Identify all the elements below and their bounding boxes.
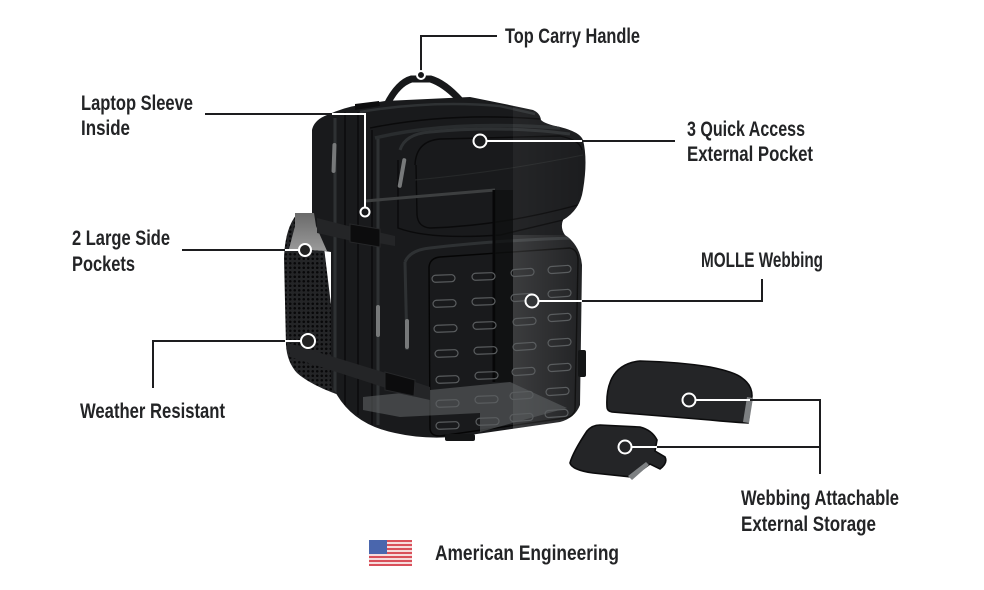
side mesh pocket bbox=[284, 214, 342, 396]
lower strap and buckle bbox=[288, 343, 430, 400]
callout: top carry handle bbox=[417, 24, 640, 79]
infographic canvas bbox=[72, 28, 898, 566]
water bottle bbox=[289, 213, 327, 251]
upper strap and buckle bbox=[317, 218, 395, 247]
backpack body bbox=[312, 97, 586, 438]
callout: external storage: Webbing Attachable bbox=[741, 486, 899, 510]
callout: side pockets: Pockets bbox=[72, 252, 135, 276]
callout: laptop sleeve: Inside bbox=[81, 116, 130, 140]
icon: american flag bbox=[369, 540, 412, 566]
body panel seams bbox=[335, 104, 583, 436]
callout: top carry handle: Top Carry Handle bbox=[505, 24, 640, 48]
top handle base bbox=[355, 101, 380, 110]
footer label: American Engineering bbox=[435, 541, 619, 565]
dark shadow band bbox=[495, 190, 513, 382]
callout: weather resistant bbox=[80, 334, 315, 423]
callout: external storage: External Storage bbox=[741, 512, 876, 536]
callout: quick access pocket: External Pocket bbox=[687, 142, 813, 166]
callout: external storage bbox=[618, 394, 899, 536]
callout: quick access pocket bbox=[474, 117, 813, 166]
side strap nub bbox=[578, 350, 586, 377]
callout: laptop sleeve bbox=[81, 91, 370, 216]
upper reflection band bbox=[513, 106, 542, 235]
callout: side pockets bbox=[72, 226, 311, 276]
callout: quick access pocket: 3 Quick Access bbox=[687, 117, 805, 141]
callout: side pockets: 2 Large Side bbox=[72, 226, 170, 250]
zipper pulls bbox=[331, 143, 409, 349]
callout: weather resistant: Weather Resistant bbox=[80, 399, 225, 423]
callout: MOLLE webbing: MOLLE Webbing bbox=[701, 248, 823, 272]
large storage pouch bbox=[607, 361, 753, 423]
callout: laptop sleeve: Laptop Sleeve bbox=[81, 91, 193, 115]
bottom foot bbox=[445, 434, 475, 441]
small storage pouch bbox=[570, 425, 666, 480]
lower reflection band bbox=[513, 235, 582, 428]
bottom highlight bbox=[363, 382, 567, 432]
callout: MOLLE webbing bbox=[526, 248, 823, 308]
icon: top carry handle bbox=[384, 76, 463, 104]
backpack illustration bbox=[284, 76, 588, 441]
MOLLE webbing slots bbox=[432, 265, 571, 429]
